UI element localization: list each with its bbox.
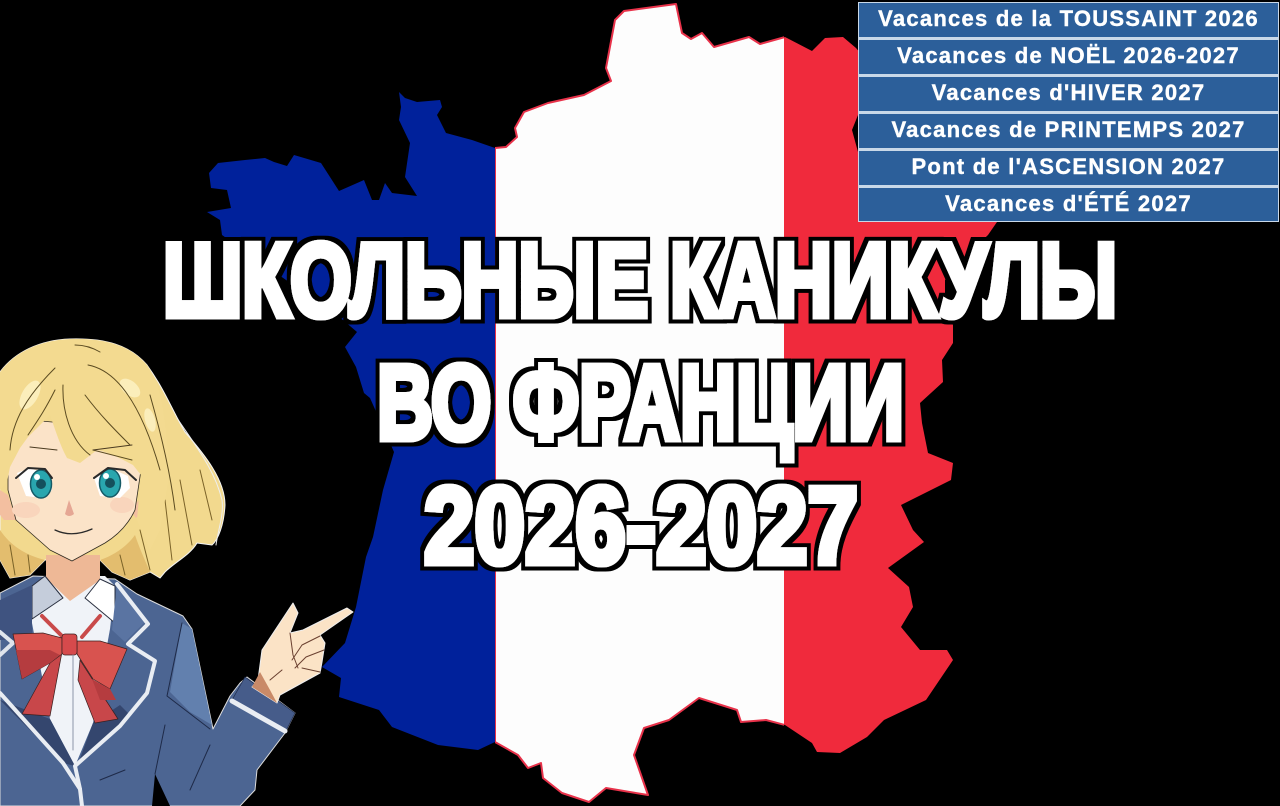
mouth [55,529,92,534]
loose hair strand [177,418,222,545]
wrist [252,672,277,703]
hair highlights [15,377,45,413]
row: Ete [859,188,1278,221]
row: Noel: Vacances de NOËL 2026-2027 [897,43,1240,68]
cuff stripes [232,701,285,731]
title [163,223,1117,587]
left eye [16,468,52,498]
jacket highlight [170,623,212,725]
neck [46,555,100,601]
hand pointing [252,603,353,703]
shirt placket and buttons [72,655,74,750]
nose [65,500,74,516]
fringe hair [0,339,170,550]
anime schoolgirl character pointing at the map [0,339,353,806]
finger lines [270,633,324,680]
bow wings [13,633,127,689]
inner dark lapels [0,700,75,766]
bow tails [22,652,118,723]
jacket torso and sleeve [0,576,295,806]
sleeve cuff [232,677,295,733]
row: Toussaint: Vacances de la TOUSSAINT 2026 [878,6,1259,31]
eyebrows [30,445,132,450]
shirt collar [32,576,63,619]
lower hair shade [0,530,150,580]
row: Hiver: Vacances d'HIVER 2027 [932,80,1205,105]
ears [0,490,148,520]
hair strands [10,345,175,510]
row: Noel [859,40,1278,74]
lower hair strands [10,470,212,575]
jacket seams [100,623,210,790]
row: Printemps [859,114,1278,148]
bow ribbon straps [42,616,100,637]
map of France in tricolour [207,3,997,803]
title line 2: ВО ФРАНЦИИ [377,344,904,462]
shirt [32,576,115,766]
face [8,420,141,561]
bow knot [62,634,77,655]
back hair [0,339,225,580]
row: Toussaint [859,3,1278,37]
right eye [94,468,136,498]
title line 3: 2026-2027 [424,465,858,587]
row: Printemps: Vacances de PRINTEMPS 2027 [891,117,1246,142]
row: Ete: Vacances d'ÉTÉ 2027 [945,191,1192,216]
cheek blush [12,502,40,518]
row: Ascension: Pont de l'ASCENSION 2027 [912,154,1225,179]
row: Ascension [859,151,1278,185]
lapel white stripes [0,693,82,806]
bow shading [16,650,116,700]
row: Hiver [859,77,1278,111]
navigation table of holidays [858,2,1279,222]
slit between torso and arm [152,774,170,806]
